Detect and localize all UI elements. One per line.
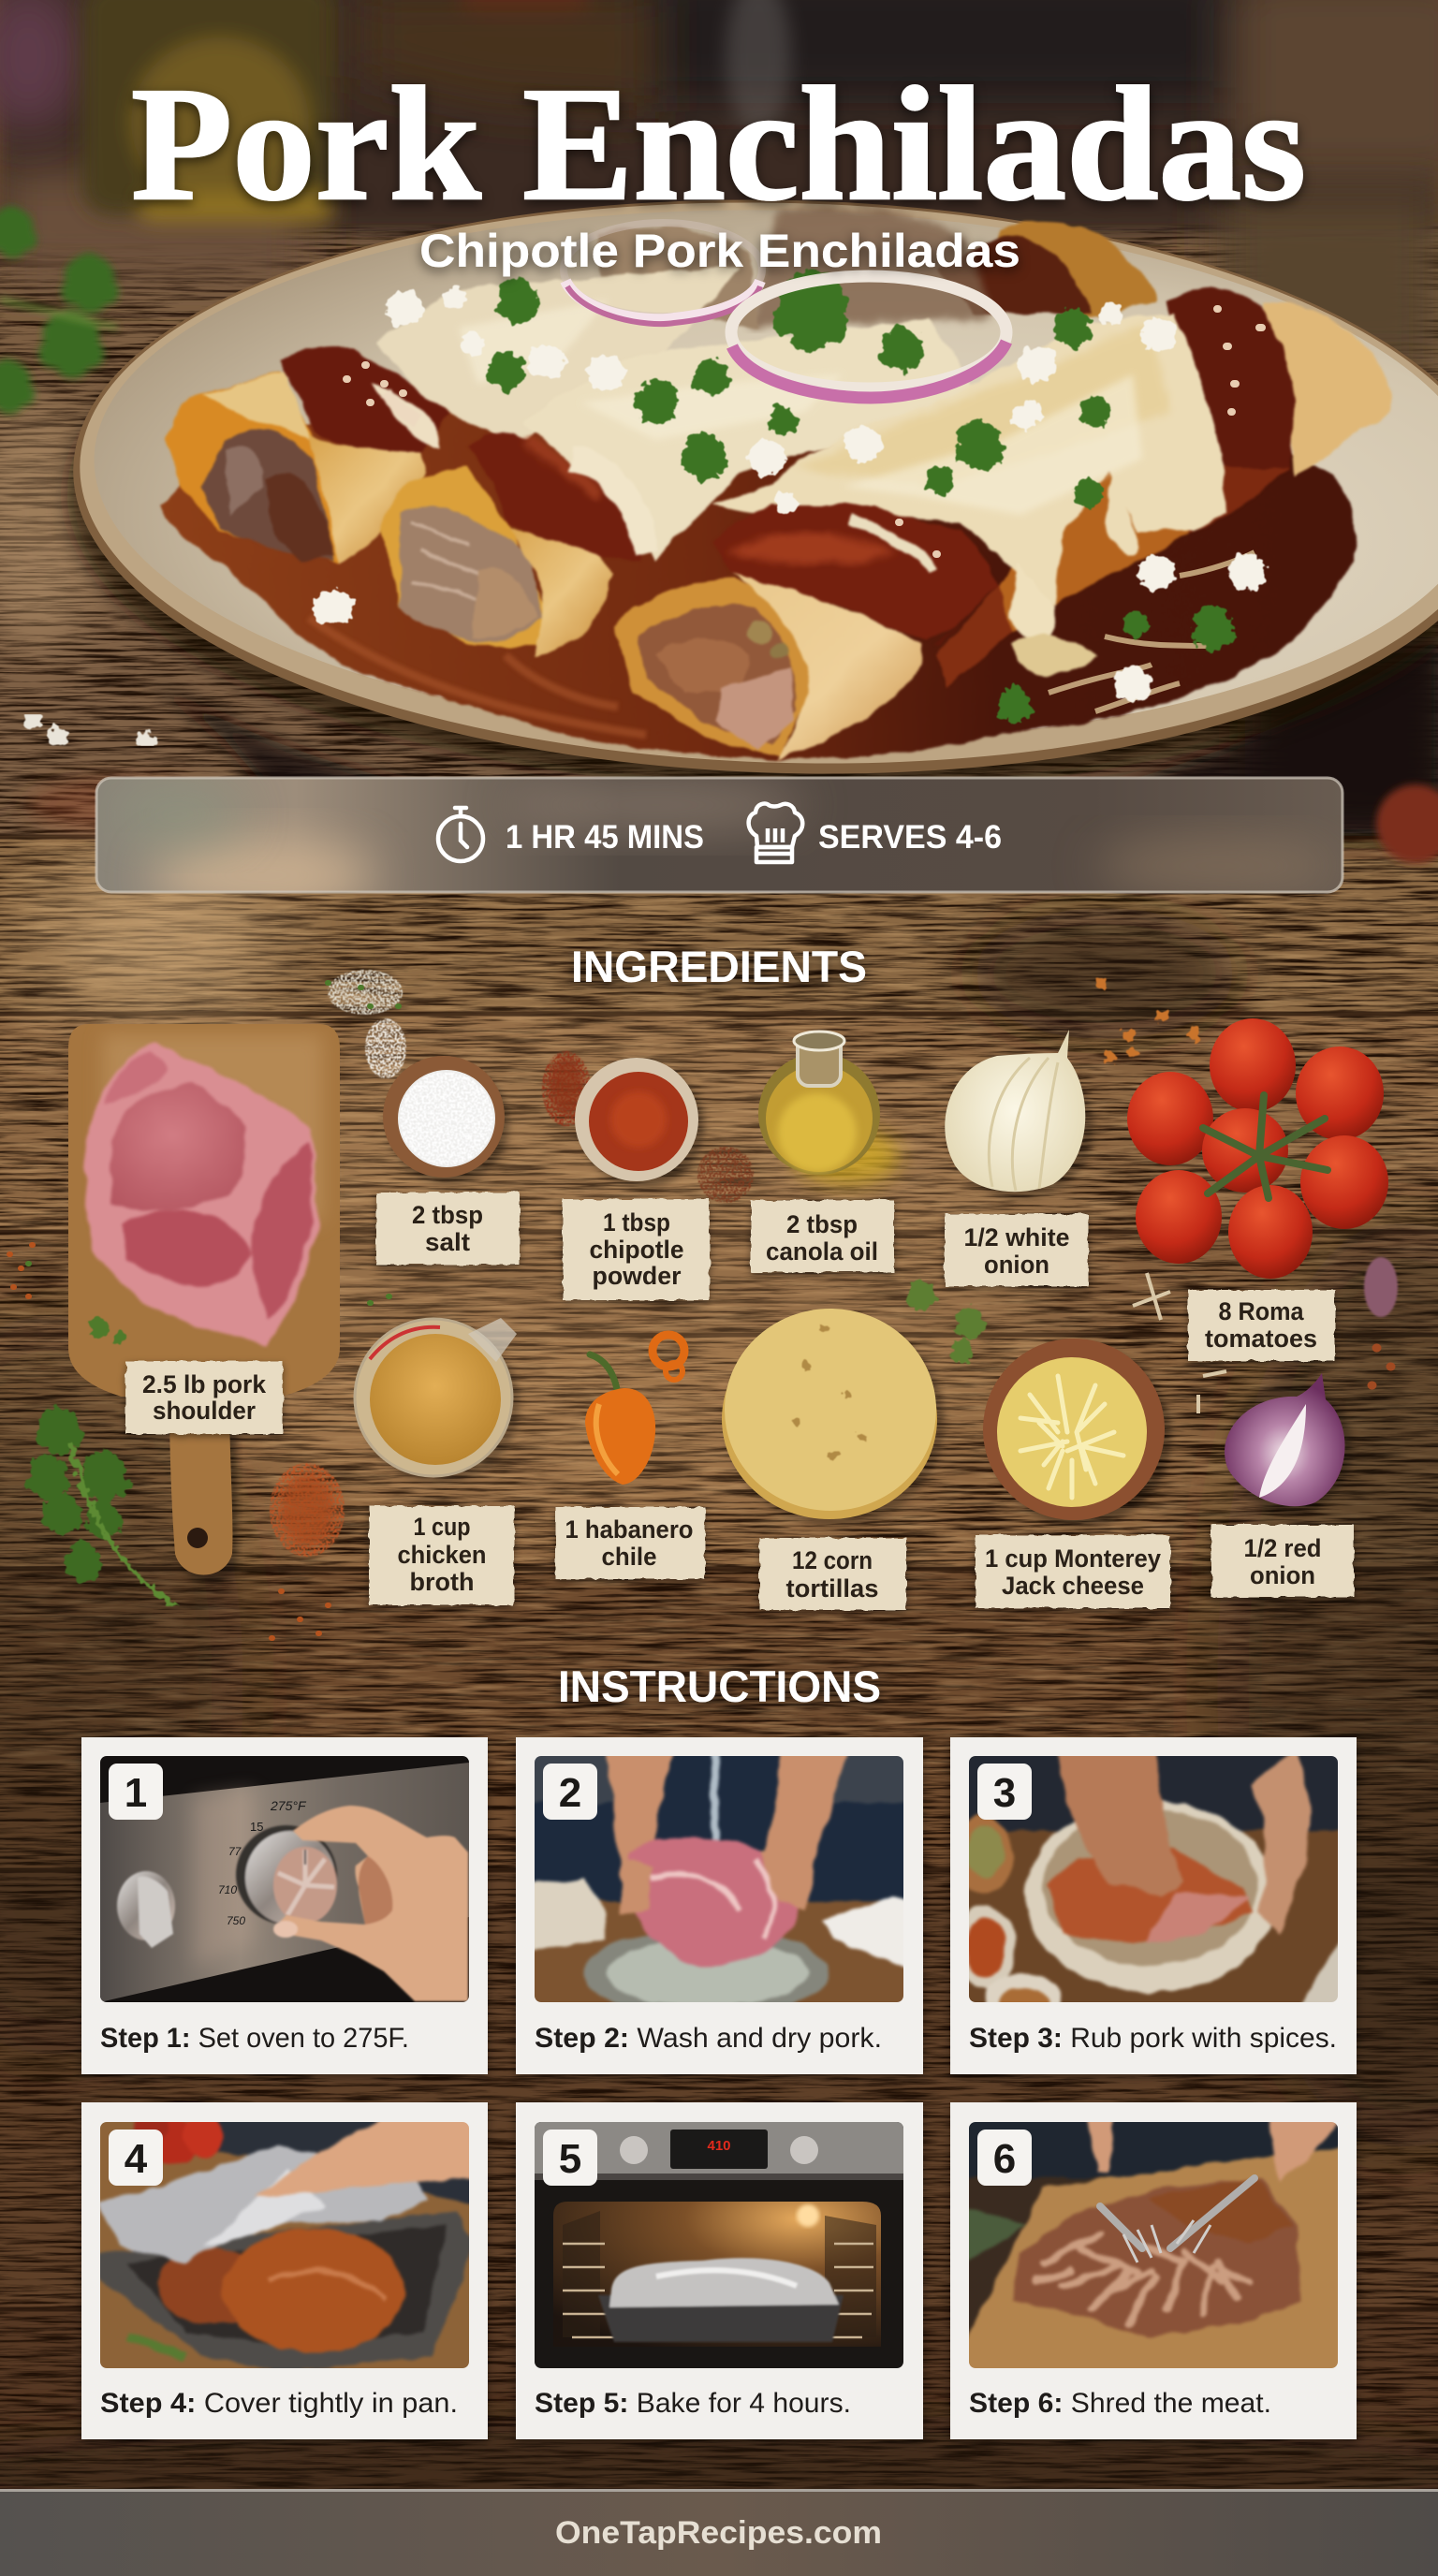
label: chipotle powder: powder	[592, 1262, 682, 1290]
ingredient: chipotle powder bowl	[575, 1058, 704, 1188]
small feta crumbles	[454, 300, 1111, 504]
photo: oven baking	[535, 2122, 903, 2368]
heading: ingredients: INGREDIENTS	[571, 942, 867, 991]
ingredient: corn tortillas	[722, 1309, 945, 1527]
badge: step number 5	[543, 2130, 597, 2186]
label: Monterey Jack cheese: Jack cheese	[1002, 1572, 1144, 1600]
photo: oven dial	[100, 1756, 469, 2002]
label: pork shoulder: shoulder	[153, 1397, 256, 1425]
badge: step number 4: 4	[125, 2136, 148, 2182]
caption: step 1: Step 1: Set oven to 275F.	[100, 2023, 409, 2054]
cheese shreds in sauce	[1049, 552, 1255, 711]
hero photo: blurred backdrop	[0, 0, 1438, 863]
blurred oil jar	[82, 0, 335, 222]
panel: step 4	[81, 2102, 488, 2439]
badge: step number 3	[977, 1764, 1032, 1820]
ingredient: red onion	[1225, 1373, 1352, 1513]
enchilada 1	[166, 267, 740, 564]
badge: step number 3: 3	[993, 1770, 1016, 1816]
ingredient: salt bowl	[383, 1056, 509, 1184]
panel: step 5	[516, 2102, 923, 2439]
label: Monterey Jack cheese	[976, 1535, 1170, 1608]
label: corn tortillas: 12 corn	[792, 1546, 873, 1574]
label: red onion	[1211, 1525, 1354, 1597]
caption: step 4: Step 4: Cover tightly in pan.	[100, 2388, 458, 2419]
label: corn tortillas: tortillas	[786, 1574, 878, 1603]
ingredient: canola oil jar	[758, 1032, 899, 1184]
label: salt	[376, 1193, 520, 1265]
label: Monterey Jack cheese: 1 cup Monterey	[985, 1544, 1161, 1573]
label: chipotle powder: 1 tbsp	[603, 1208, 670, 1237]
back enchilada end	[599, 206, 1156, 328]
panel: ingredient layout	[9, 970, 1398, 1638]
badge: step number 2	[543, 1764, 597, 1820]
ingredient: cilantro sprig	[25, 1405, 174, 1604]
label: chicken broth: 1 cup	[414, 1513, 470, 1541]
ingredient: white onion	[945, 1030, 1093, 1199]
photo: rubbing pork with spices	[956, 1747, 1347, 2024]
badge: step number 6	[977, 2130, 1032, 2186]
icon: chef hat	[749, 804, 802, 862]
photo: oven dial: 15	[250, 1820, 263, 1834]
label: Roma tomatoes: tomatoes	[1205, 1325, 1317, 1353]
label: salt: salt	[425, 1228, 470, 1256]
feta crumbs on table	[32, 719, 146, 741]
label: chicken broth: chicken	[397, 1541, 487, 1569]
label: canola oil	[751, 1200, 894, 1272]
hero: plate of enchiladas	[60, 182, 1438, 810]
label: red onion: 1/2 red	[1243, 1534, 1322, 1562]
badge: step number 6: 6	[993, 2136, 1016, 2182]
badge: step number 2: 2	[559, 1770, 581, 1816]
label: habanero chile	[555, 1507, 705, 1579]
label: chipotle powder: chipotle	[590, 1236, 683, 1264]
label: salt: 2 tbsp	[412, 1201, 483, 1229]
label: Roma tomatoes: 8 Roma	[1219, 1297, 1304, 1325]
label: habanero chile: 1 habanero	[565, 1515, 693, 1544]
cilantro sprig, upper left	[0, 206, 119, 414]
sauce pool	[161, 374, 1356, 760]
badge: step number 4	[109, 2130, 163, 2186]
title: Pork Enchiladas	[131, 53, 1306, 234]
badge: step number 1: 1	[125, 1770, 147, 1816]
footer website: OneTapRecipes.com	[555, 2515, 882, 2551]
feta crumbles	[330, 309, 1248, 684]
label: canola oil: 2 tbsp	[786, 1210, 858, 1238]
photo: washing pork	[535, 1756, 903, 2002]
caption: step 6: Step 6: Shred the meat.	[969, 2388, 1271, 2419]
icon: stopwatch	[438, 808, 483, 861]
enchilada 2	[381, 318, 983, 657]
caption: step 2: Step 2: Wash and dry pork.	[535, 2023, 882, 2054]
label: white onion: onion	[984, 1251, 1049, 1279]
ingredient: Roma tomatoes on the vine	[1127, 1018, 1388, 1279]
photo: foil-covered pan	[91, 2110, 478, 2378]
servings: SERVES 4-6	[818, 819, 1002, 856]
ingredient: Monterey Jack cheese bowl	[983, 1339, 1171, 1527]
enchilada 3	[615, 289, 1390, 760]
stats bar	[95, 777, 1344, 893]
badge: step number 1	[109, 1764, 163, 1820]
photo: shredding pork	[960, 2113, 1347, 2378]
panel: step 3	[950, 1737, 1357, 2074]
label: corn tortillas	[759, 1538, 906, 1610]
photo: oven dial: 750	[227, 1914, 245, 1927]
label: Roma tomatoes	[1188, 1290, 1335, 1361]
plate	[60, 182, 1438, 810]
ingredient labels	[125, 1193, 1354, 1610]
photo: oven dial: 710	[218, 1883, 237, 1896]
label: white onion	[945, 1214, 1088, 1286]
caption: step 5: Step 5: Bake for 4 hours.	[535, 2388, 851, 2419]
label: pork shoulder: 2.5 lb pork	[142, 1370, 267, 1398]
ingredient: chicken broth cup	[355, 1318, 520, 1484]
heading: instructions: INSTRUCTIONS	[558, 1661, 881, 1711]
label: white onion: 1/2 white	[964, 1223, 1069, 1251]
label: chipotle powder	[563, 1199, 710, 1300]
ingredient: cutting board with pork	[68, 1024, 340, 1582]
label: red onion: onion	[1250, 1561, 1315, 1589]
photo: oven dial: 77	[228, 1845, 242, 1858]
scattered spices and herbs	[9, 970, 1398, 1638]
caption: step 3: Step 3: Rub pork with spices.	[969, 2023, 1337, 2054]
label: habanero chile: chile	[601, 1543, 657, 1571]
badge: step number 5: 5	[559, 2136, 581, 2182]
label: canola oil: canola oil	[766, 1237, 878, 1266]
cilantro garnish	[487, 263, 1236, 724]
photo: oven dial: 275°F	[270, 1798, 307, 1813]
footer bar	[0, 2489, 1438, 2576]
cook time: 1 HR 45 MINS	[506, 819, 704, 856]
ingredient: habanero chile	[585, 1335, 684, 1485]
red onion rings	[564, 223, 1006, 398]
subtitle: Chipotle Pork Enchiladas	[419, 225, 1020, 277]
panel: step 2	[516, 1737, 923, 2074]
label: chicken broth: broth	[410, 1568, 474, 1596]
panel: step 1	[81, 1737, 488, 2074]
melted cheese highlights	[459, 300, 1142, 515]
panel: step 6	[950, 2102, 1357, 2439]
sauce and cheese flecks	[346, 309, 1262, 554]
label: pork shoulder	[125, 1361, 283, 1434]
label: chicken broth	[369, 1506, 514, 1605]
photo: oven baking: 410	[707, 2138, 731, 2154]
